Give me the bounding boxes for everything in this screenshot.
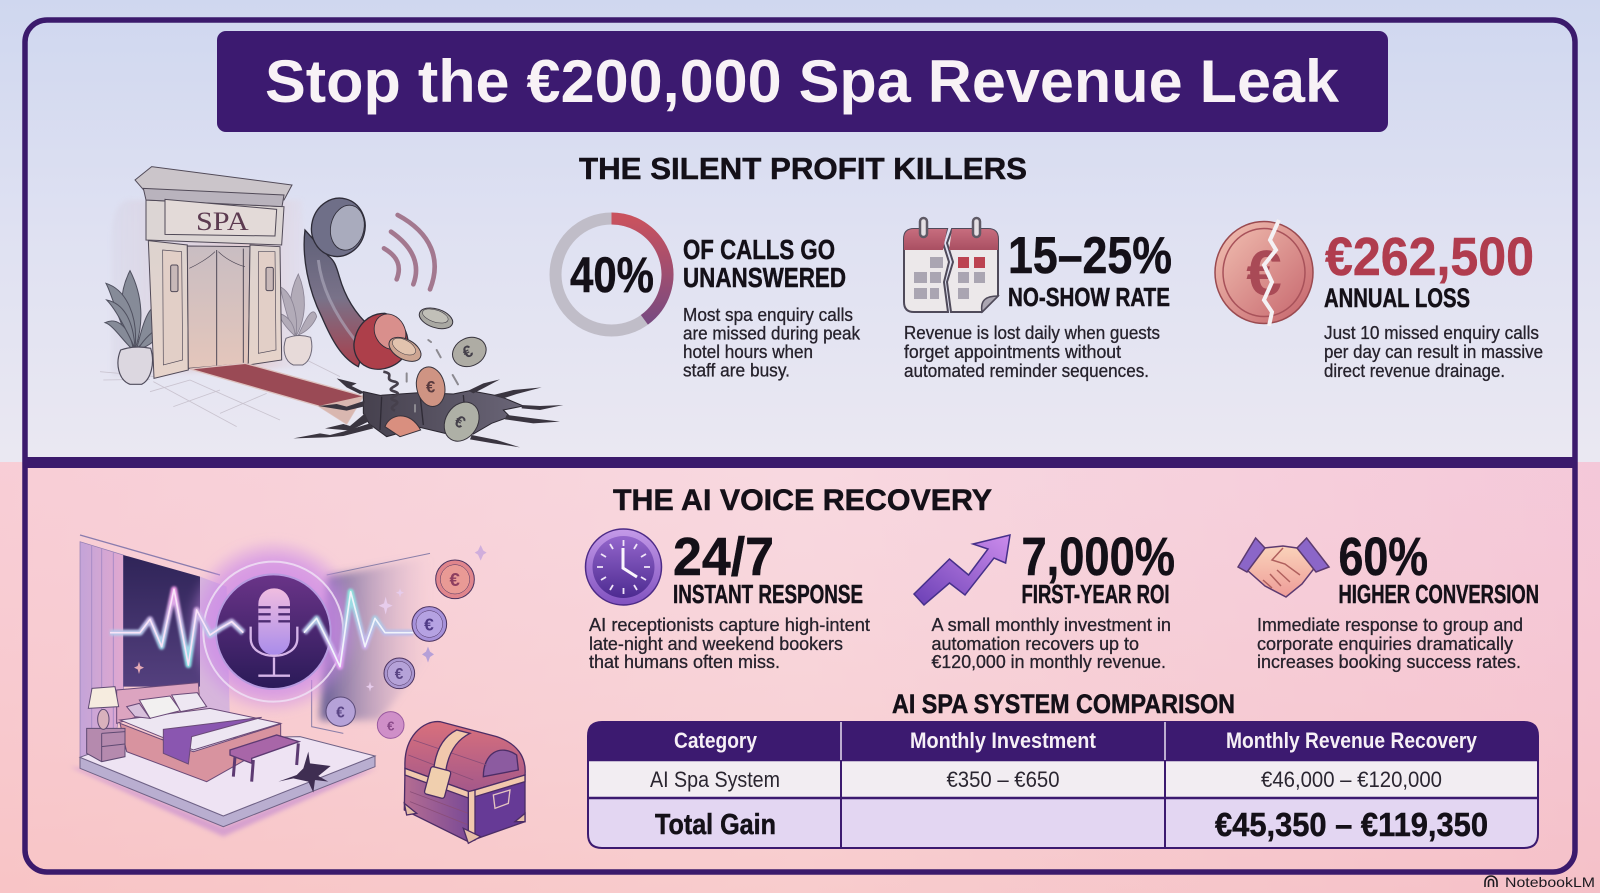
falling coins: € xyxy=(459,341,476,362)
stat label: FIRST-YEAR ROI xyxy=(1022,579,1170,609)
icon: handshake xyxy=(1238,538,1329,597)
floor platform xyxy=(80,737,375,827)
stat label: OF CALLS GO xyxy=(683,234,835,265)
illustration: hotel room, AI microphone, coins and treasure chest xyxy=(70,535,525,843)
table header row: Monthly Investment xyxy=(910,728,1097,753)
stat: annual loss xyxy=(1215,220,1543,381)
table row: AI spa system: €46,000 – €120,000 xyxy=(1261,767,1442,792)
big number: 15–25% xyxy=(1008,227,1172,285)
icon: microphone xyxy=(251,588,297,676)
NotebookLM watermark: NotebookLM xyxy=(1505,874,1595,890)
stat description: Revenue is lost daily when guests xyxy=(904,323,1160,343)
floor shadow xyxy=(70,767,377,837)
floating euro coins: € xyxy=(336,704,345,721)
heading: the silent profit killers: THE SILENT PROFIT KILLERS xyxy=(579,151,1027,186)
stat description: AI receptionists capture high-intent xyxy=(589,615,870,635)
comparison table xyxy=(588,722,1538,848)
stat label: UNANSWERED xyxy=(683,262,846,293)
stat label xyxy=(683,234,846,293)
big number: 60% xyxy=(1338,527,1428,587)
title banner: Stop the €200,000 Spa Revenue Leak xyxy=(265,48,1340,115)
stat description: staff are busy. xyxy=(683,360,790,380)
stat description: late-night and weekend bookers xyxy=(589,634,843,654)
red carpet xyxy=(190,363,363,424)
stat description: hotel hours when xyxy=(683,342,813,362)
stat description: corporate enquiries dramatically xyxy=(1257,634,1513,654)
big number: 7,000% xyxy=(1022,527,1175,587)
floating euro coins: € xyxy=(449,569,460,590)
big number: €262,500 xyxy=(1325,227,1534,287)
stat description: automation recovers up to xyxy=(932,634,1139,654)
stat description xyxy=(1324,323,1543,381)
falling coins xyxy=(385,304,491,448)
donut gauge 40% xyxy=(556,218,668,330)
floating euro coins xyxy=(326,560,474,738)
stat description: direct revenue drainage. xyxy=(1324,361,1505,381)
sign text: SPA xyxy=(196,207,249,236)
stat description: Just 10 missed enquiry calls xyxy=(1324,323,1539,343)
plant left xyxy=(105,271,165,384)
heading: the AI voice recovery: THE AI VOICE RECOVERY xyxy=(613,484,992,517)
stat label: NO-SHOW RATE xyxy=(1008,282,1170,312)
stat: 40% of calls go unanswered xyxy=(556,218,861,380)
stat description xyxy=(589,615,870,672)
sparkles xyxy=(134,545,487,692)
stat description: are missed during peak xyxy=(683,324,861,344)
neon voice waveform xyxy=(110,589,413,667)
stat description: €120,000 in monthly revenue. xyxy=(932,652,1166,672)
plant right xyxy=(279,274,317,365)
heading: comparison table: AI SPA SYSTEM COMPARISON xyxy=(892,689,1235,719)
floating euro coins: € xyxy=(387,718,395,733)
table row: total gain: €45,350 – €119,350 xyxy=(1215,806,1488,843)
falling coins: € xyxy=(451,411,469,432)
portico building xyxy=(135,167,292,378)
floating euro coins: € xyxy=(395,666,404,683)
icon: torn calendar xyxy=(904,218,998,312)
stat: no-show rate xyxy=(904,218,1172,381)
stat: 7,000% first-year ROI xyxy=(914,527,1175,672)
stat label: ANNUAL LOSS xyxy=(1324,283,1470,313)
table row: total gain: Total Gain xyxy=(655,809,776,841)
stat description: automated reminder sequences. xyxy=(904,361,1149,381)
table row: AI spa system xyxy=(589,760,1537,798)
stat label: INSTANT RESPONSE xyxy=(673,579,863,609)
stat: 24/7 instant response xyxy=(586,527,870,672)
stat description: that humans often miss. xyxy=(589,652,780,672)
icon: broken euro coin: € xyxy=(1246,237,1282,309)
door xyxy=(187,246,250,368)
stat description: A small monthly investment in xyxy=(932,615,1171,635)
stat description: Immediate response to group and xyxy=(1257,615,1523,635)
falling coins: € xyxy=(426,378,435,397)
glow, ring and microphone disc xyxy=(185,538,362,715)
icon: broken euro coin xyxy=(1215,220,1313,326)
phone cord xyxy=(383,372,398,411)
stat description xyxy=(932,615,1171,672)
stat description: per day can result in massive xyxy=(1324,342,1543,362)
floor crack xyxy=(278,752,331,793)
big number: 24/7 xyxy=(673,527,774,587)
left pillar xyxy=(148,241,188,378)
bench xyxy=(230,735,299,782)
signal waves xyxy=(384,215,435,289)
table header row xyxy=(588,722,1538,760)
icon: clock xyxy=(586,529,662,605)
floor tiles xyxy=(100,353,340,427)
back wall glow xyxy=(112,200,313,377)
stat description: forget appointments without xyxy=(904,342,1121,362)
stat: 60% higher conversion xyxy=(1238,527,1539,672)
donut gauge 40%: 40% xyxy=(570,247,654,303)
stat description: Most spa enquiry calls xyxy=(683,305,853,325)
right pillar xyxy=(248,245,282,365)
icon: rising arrow xyxy=(914,535,1010,605)
floating euro coins: € xyxy=(424,614,434,634)
floor crack and hole xyxy=(293,378,563,447)
table row: AI spa system: €350 – €650 xyxy=(946,767,1060,792)
room walls and window xyxy=(80,535,430,760)
table header row: Category xyxy=(674,728,758,753)
table row: AI spa system: AI Spa System xyxy=(650,767,780,792)
stat description xyxy=(1257,615,1523,672)
telephone handset xyxy=(304,192,412,369)
table row: total gain xyxy=(589,798,1537,848)
bed xyxy=(117,683,281,782)
stat description xyxy=(683,305,861,380)
illustration: spa entrance, ringing phone and coins falling into a crack xyxy=(100,167,563,448)
stat description: increases booking success rates. xyxy=(1257,652,1521,672)
stat description xyxy=(904,323,1160,381)
title banner xyxy=(217,31,1388,132)
table header row: Monthly Revenue Recovery xyxy=(1226,728,1478,753)
bedside lamp and table xyxy=(87,687,125,762)
icon: treasure chest xyxy=(404,722,525,843)
